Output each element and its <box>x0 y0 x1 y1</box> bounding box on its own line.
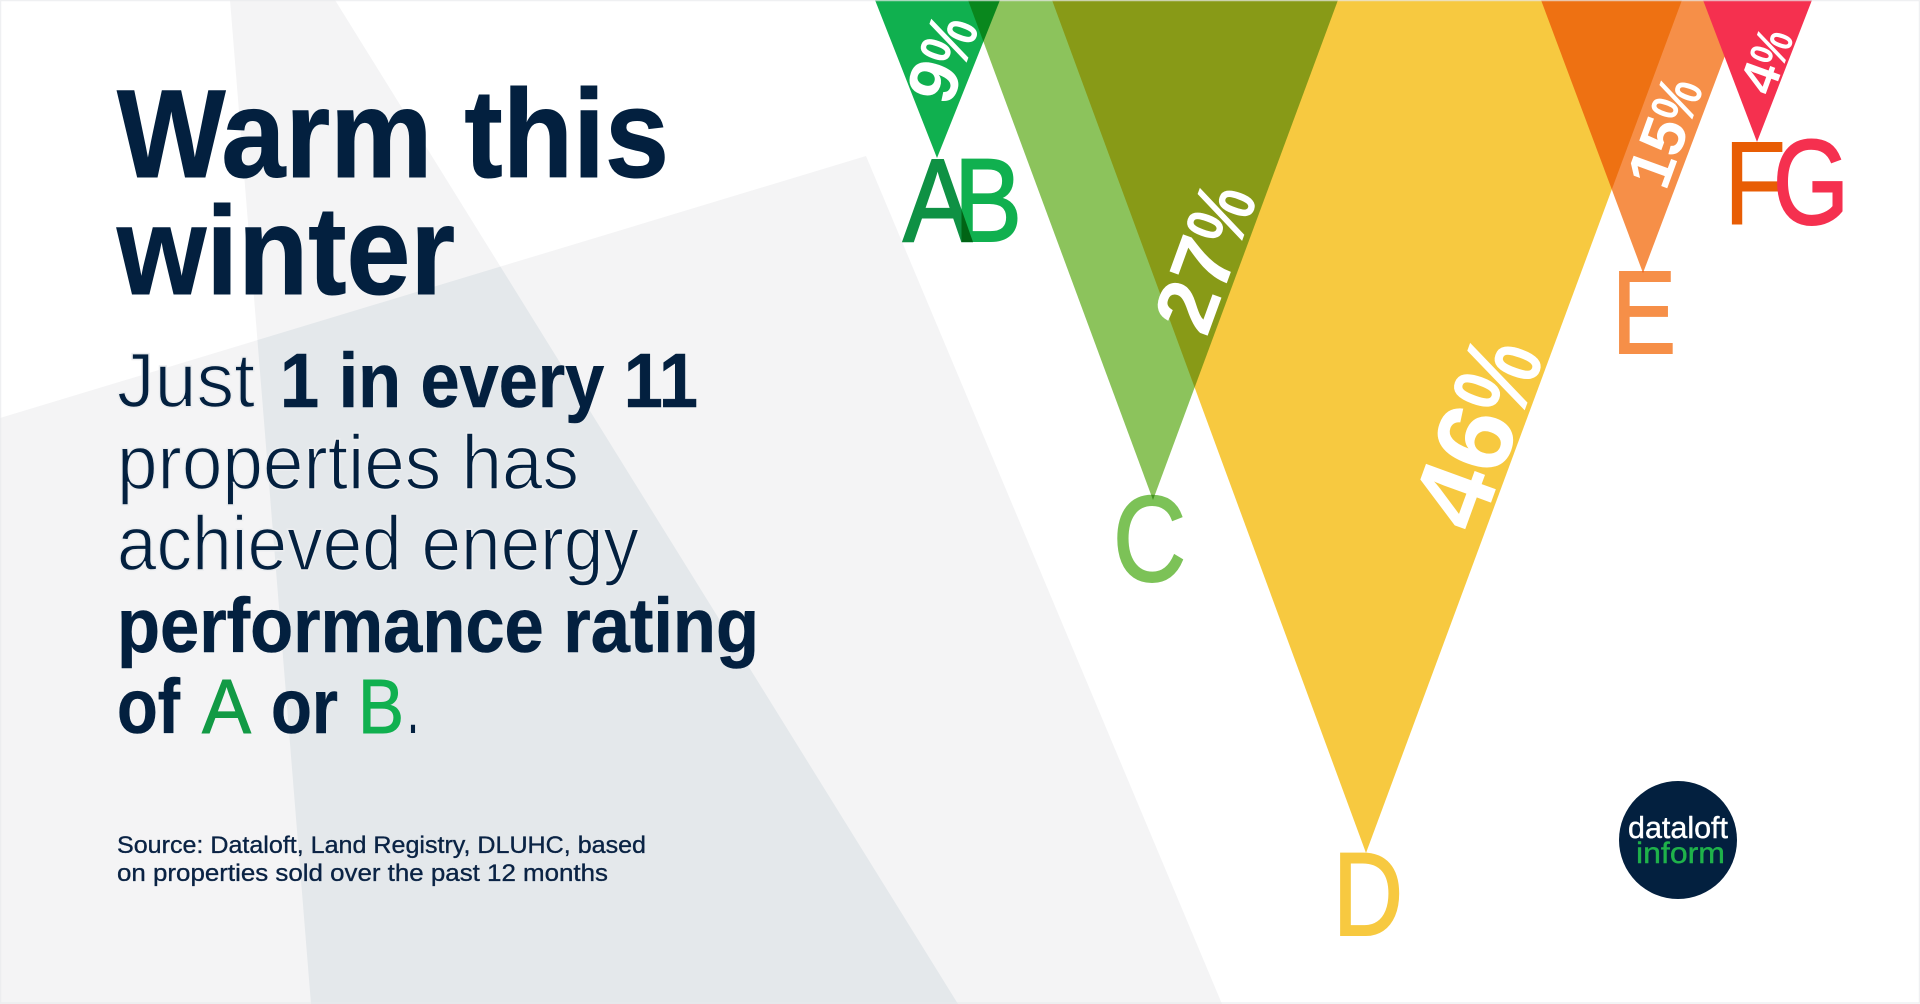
label: 46%: % <box>1428 322 1566 431</box>
label: 46% <box>1387 322 1566 544</box>
source note: Source: Dataloft, Land Registry, DLUHC, based <box>117 832 646 859</box>
label: 15%: 15 <box>1614 108 1703 197</box>
statement text: of <box>117 664 180 750</box>
label: 27%: % <box>1167 171 1275 257</box>
triangle: E <box>1541 0 1746 273</box>
statement text: A <box>202 664 252 750</box>
background shapes <box>0 0 1222 1004</box>
letter: B: B <box>954 135 1022 267</box>
letter: G: G <box>1773 114 1849 250</box>
statement text: . <box>407 664 419 750</box>
statement text: 1 in every 11 <box>280 338 698 424</box>
letter: A: A <box>903 135 972 267</box>
percentage labels <box>891 5 1805 544</box>
triangle: D <box>1052 0 1682 853</box>
statement text: properties has <box>117 420 579 506</box>
label: 9% <box>891 5 994 113</box>
triangle: C <box>968 0 1338 500</box>
logo: dataloft inform <box>1619 781 1737 899</box>
statement text: B <box>358 664 404 750</box>
statement text: Just <box>117 338 255 424</box>
triangle: AB <box>875 0 1000 158</box>
statement text <box>117 338 759 750</box>
rating letters <box>903 114 1849 961</box>
letter: E: E <box>1612 247 1676 379</box>
triangle: FG <box>1703 0 1812 142</box>
source note <box>117 832 646 887</box>
title <box>116 65 669 321</box>
label: 9%: 9 <box>891 50 978 113</box>
logo: dataloft inform: inform <box>1636 837 1725 870</box>
label: 27% <box>1135 171 1275 345</box>
statement text: or <box>271 664 338 750</box>
letter: F: F <box>1724 118 1786 250</box>
label: 27%: 27 <box>1135 225 1255 345</box>
letter: D: D <box>1333 829 1403 961</box>
label: 4%: 4 <box>1729 54 1794 101</box>
statement text: achieved energy <box>117 501 639 587</box>
label: 15% <box>1614 69 1717 197</box>
title: Warm this <box>117 65 669 204</box>
label: 15%: % <box>1638 69 1717 132</box>
label: 46%: 46 <box>1387 389 1542 544</box>
label: 4% <box>1729 21 1805 101</box>
energy rating triangles <box>875 0 1812 853</box>
logo: dataloft inform: dataloft <box>1628 810 1728 845</box>
label: 4%: % <box>1739 21 1805 74</box>
title: winter <box>116 182 455 321</box>
letter: C: C <box>1113 471 1186 607</box>
statement text: performance rating <box>117 583 759 669</box>
source note: on properties sold over the past 12 months <box>117 860 608 887</box>
